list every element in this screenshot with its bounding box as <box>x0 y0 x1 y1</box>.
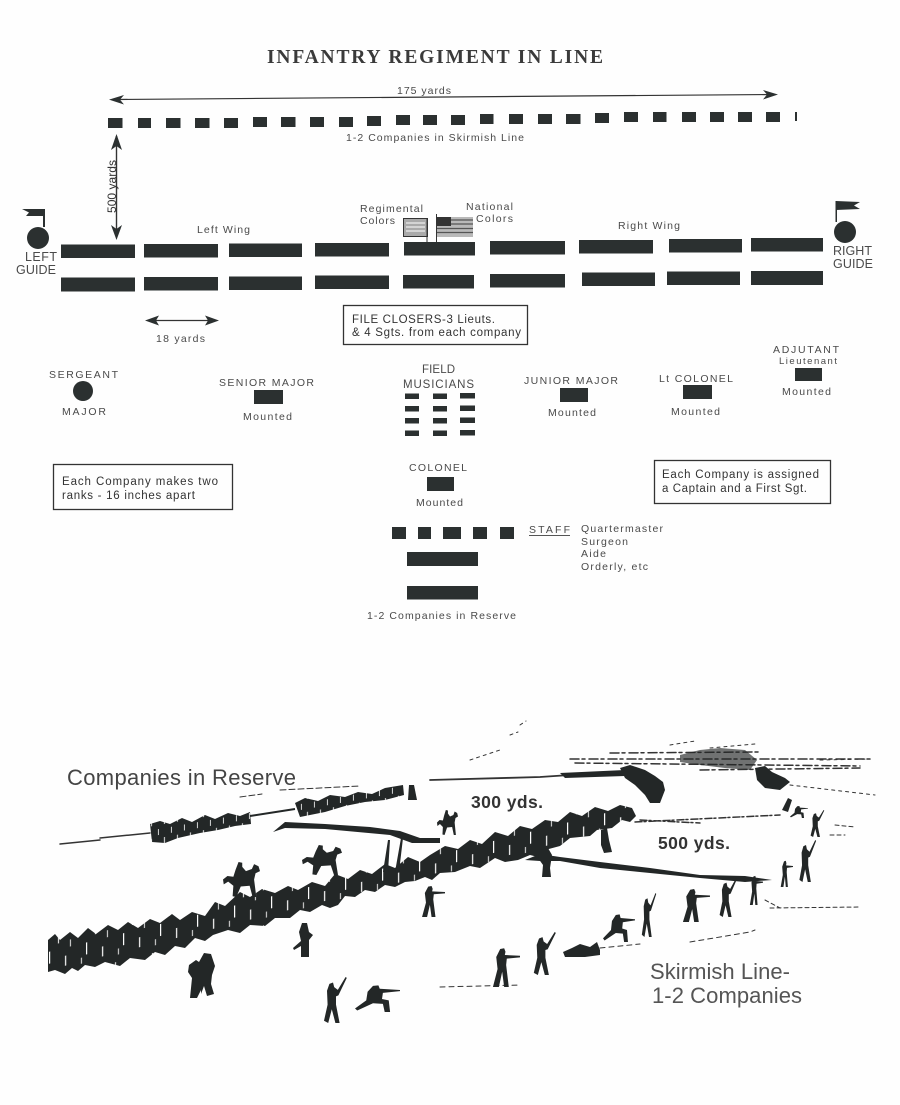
main line of battle <box>48 805 636 974</box>
junior major: JUNIOR MAJOR <box>524 375 618 387</box>
label: left guide: LEFT <box>25 250 57 264</box>
lt colonel <box>659 373 733 418</box>
reserve companies <box>407 552 478 600</box>
staff list <box>529 523 664 573</box>
colonel <box>409 462 467 509</box>
callout: two ranks: ranks - 16 inches apart <box>62 490 196 502</box>
junior major <box>524 375 618 419</box>
arrow: 18 yards <box>145 316 219 326</box>
distant clumps of troops <box>560 748 790 803</box>
skirmish soldiers <box>493 798 824 987</box>
label: left wing: Left Wing <box>197 224 250 236</box>
callout: file closers: FILE CLOSERS-3 Lieuts. <box>352 314 495 326</box>
soldier firing upward <box>324 977 347 1023</box>
distant officer <box>437 810 458 835</box>
lt colonel: Mounted <box>671 406 720 418</box>
sergeant major <box>49 369 119 418</box>
icon: regimental flag <box>404 218 428 243</box>
label: skirmish line: 1-2 Companies in Skirmish Line <box>346 132 524 144</box>
label: regimental colors: Regimental <box>360 203 423 215</box>
adjutant: Lieutenant <box>779 356 837 367</box>
colonel: Mounted <box>416 497 463 509</box>
adjutant: ADJUTANT <box>773 344 840 356</box>
staff list: STAFF <box>529 524 570 536</box>
senior major: Mounted <box>243 411 292 423</box>
staff list: Orderly, etc <box>581 561 648 573</box>
label: right guide <box>833 244 873 271</box>
senior major: SENIOR MAJOR <box>219 377 314 389</box>
label: skirmish line: 1-2 Companies <box>652 983 802 1008</box>
callout: captain and first sgt <box>654 460 830 504</box>
label: left guide: GUIDE <box>16 263 56 277</box>
horizon scratches <box>60 721 875 987</box>
label: 175 yards: 175 yards <box>397 85 451 97</box>
label: right guide: GUIDE <box>833 257 873 271</box>
regimental flags <box>383 838 403 872</box>
label: national colors: National <box>466 201 513 213</box>
right guide icon <box>834 201 860 243</box>
colonel: COLONEL <box>409 462 467 474</box>
label: 18 yards: 18 yards <box>156 333 205 345</box>
label: left guide <box>16 250 57 277</box>
label: right guide: RIGHT <box>833 244 872 258</box>
far reserve line <box>250 785 417 817</box>
galloping officer <box>302 845 342 875</box>
icon: national flag <box>436 214 473 242</box>
label: 500 yards: 500 yards <box>105 160 119 213</box>
callout: file closers: & 4 Sgts. from each company <box>352 327 521 339</box>
mounted officer <box>223 862 260 897</box>
sergeant major: SERGEANT <box>49 369 119 381</box>
callout: captain and first sgt: a Captain and a First Sgt. <box>662 483 807 495</box>
label: companies in reserve: 1-2 Companies in Reserve <box>367 610 516 622</box>
callout: captain and first sgt: Each Company is assigned <box>662 469 819 481</box>
arrow: 175 yards width <box>109 90 778 104</box>
staff squares <box>392 527 514 539</box>
adjutant <box>773 344 840 398</box>
battlefield illustration <box>48 721 875 1023</box>
label: national colors: Colors <box>476 213 513 225</box>
callout: file closers <box>344 306 528 344</box>
sergeant major: MAJOR <box>62 406 106 418</box>
label: regimental colors <box>360 203 423 227</box>
arrow: 500 yards gap <box>525 854 772 882</box>
label: skirmish line <box>650 959 802 1008</box>
label: skirmish line: Skirmish Line- <box>650 959 790 984</box>
label: 500 yards: 500 yds. <box>658 833 730 853</box>
adjutant: Mounted <box>782 386 831 398</box>
field musicians <box>403 364 475 436</box>
field musicians: FIELD <box>422 364 455 376</box>
senior major <box>219 377 314 423</box>
officer with sword <box>293 923 313 957</box>
label: right wing: Right Wing <box>618 220 680 232</box>
arrow: 500 yards distance <box>111 134 122 240</box>
skirmish line squares <box>108 112 797 128</box>
label: 300 yards: 300 yds. <box>471 792 543 812</box>
rear rank of companies <box>61 271 823 292</box>
staff list: Quartermaster <box>581 523 664 535</box>
callout: two ranks: Each Company makes two <box>62 476 218 488</box>
rear reserve line <box>150 812 251 843</box>
label: companies in reserve: Companies in Reserve <box>67 765 296 790</box>
front rank of companies <box>61 238 823 258</box>
prone soldier <box>355 985 400 1012</box>
callout: two ranks <box>54 464 232 510</box>
title: INFANTRY REGIMENT IN LINE <box>267 47 603 68</box>
left guide icon <box>22 209 49 249</box>
kneeling soldier <box>422 886 445 917</box>
field musicians: MUSICIANS <box>403 379 474 391</box>
label: national colors <box>466 201 513 225</box>
junior major: Mounted <box>548 407 596 419</box>
lt colonel: Lt COLONEL <box>659 373 733 385</box>
staff list: Surgeon <box>581 536 628 548</box>
staff list: Aide <box>581 548 606 560</box>
pair of soldiers <box>188 953 215 998</box>
label: regimental colors: Colors <box>360 215 395 227</box>
arrow: 300 yards gap <box>273 822 440 843</box>
